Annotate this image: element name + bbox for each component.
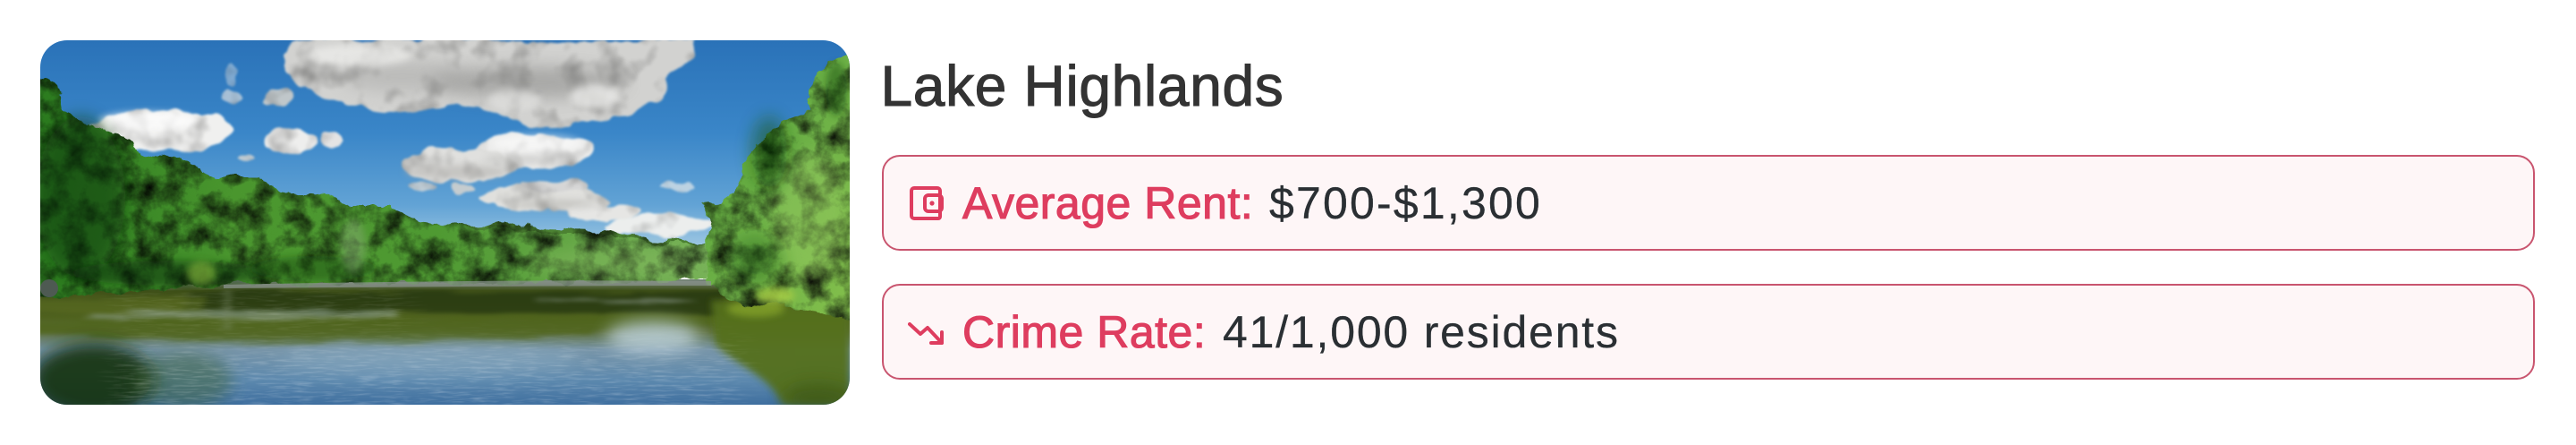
panel: average rent [882, 155, 2535, 251]
water reflections [40, 288, 850, 405]
cloud shading [429, 66, 626, 98]
value: crime rate per thousand: 41/1,000 residents [1223, 307, 1620, 357]
label: crime rate: Crime Rate: [962, 307, 1206, 357]
icon: trending down arrow [908, 322, 945, 346]
photo: lake with forested banks and cloudy sky [40, 40, 850, 405]
icon: wallet [910, 186, 944, 220]
value: rent range: $700-$1,300 [1269, 178, 1542, 228]
clouds [84, 40, 716, 236]
far hill [458, 221, 705, 247]
left bank shadows [36, 116, 689, 297]
right forest bank [701, 54, 854, 322]
title: Lake Highlands [880, 54, 1284, 118]
left forest bank [36, 78, 711, 297]
sky [40, 40, 850, 246]
right bank highlights and shadows [731, 63, 847, 304]
water [40, 279, 850, 405]
distant shoreline [224, 280, 711, 288]
label: average rent: Average Rent: [962, 178, 1253, 228]
panel: crime rate [882, 284, 2535, 380]
